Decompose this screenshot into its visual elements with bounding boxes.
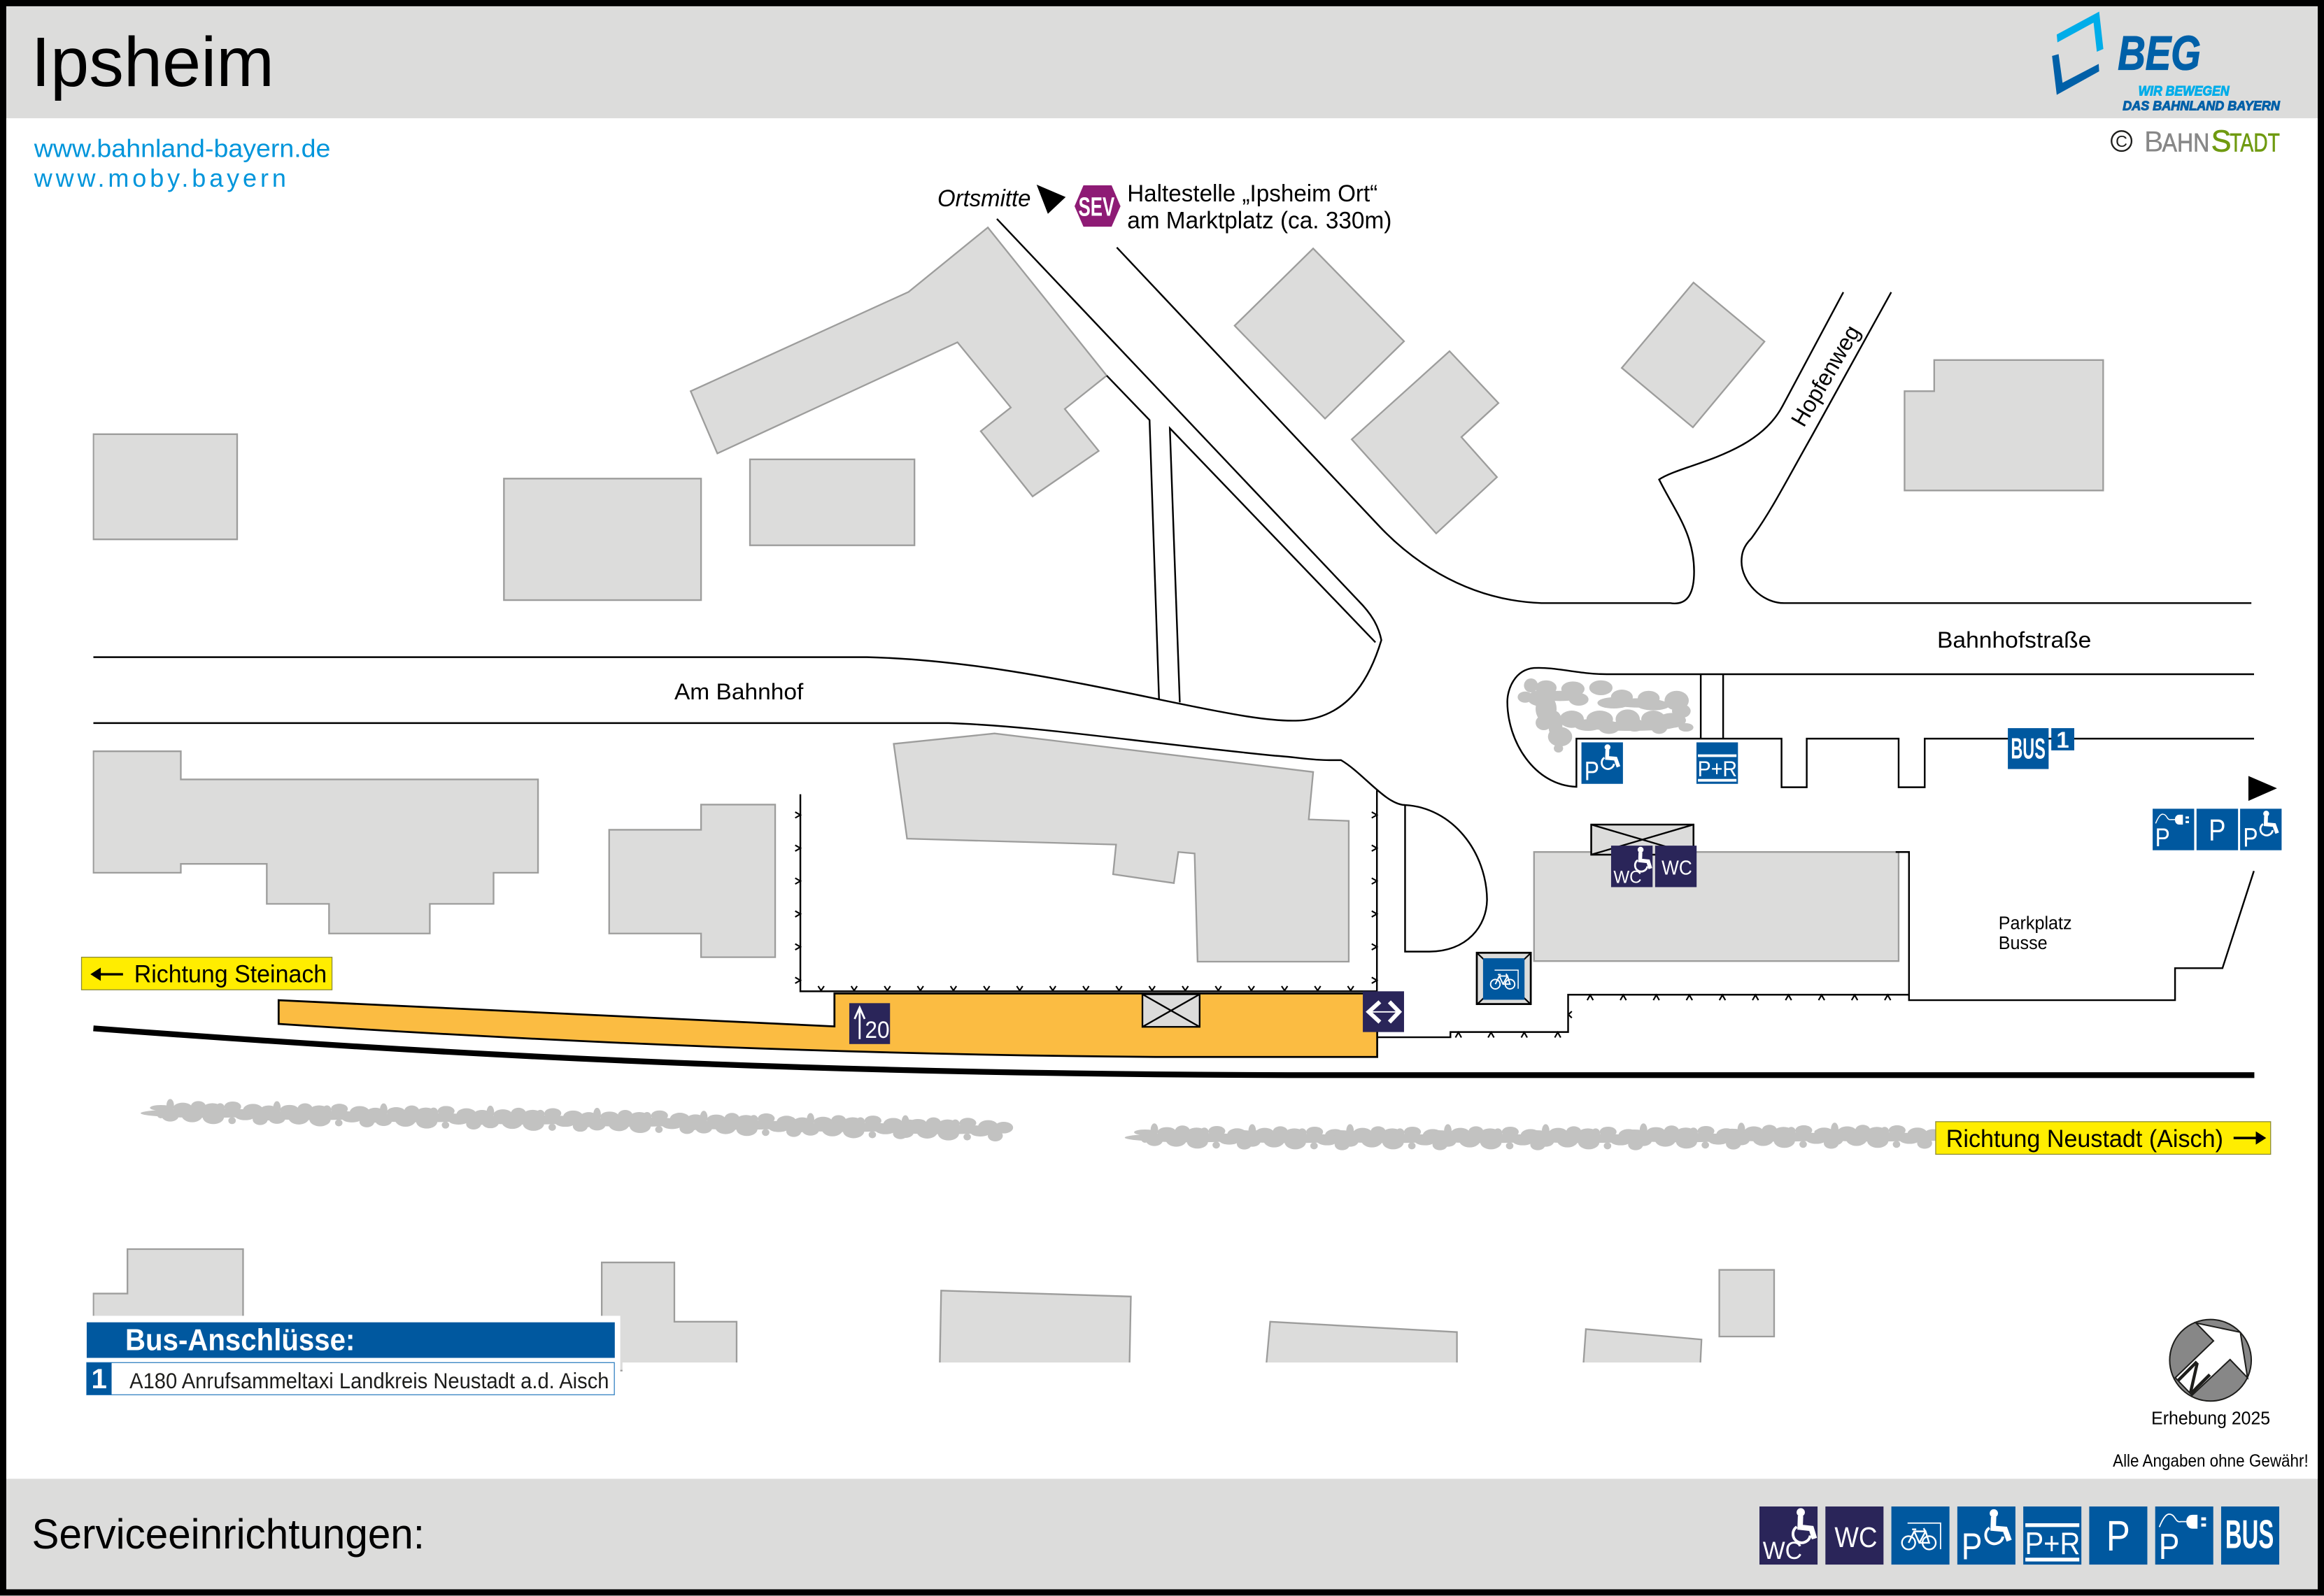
station shelter [1592,825,1694,855]
Ortsmitte label: Ortsmitte [937,185,1031,212]
icon: level access arrows [1363,991,1404,1032]
icon: accessible parking: P [1585,756,1599,786]
icon: accessible parking: P [1962,1527,1982,1568]
hedge rows along tracks [141,1099,1943,1150]
icon: accessible parking right [2240,808,2281,853]
icon: bus: BUS [2225,1512,2274,1557]
BahnStadt copyright logo: C [2116,132,2127,150]
parking hedge [1517,678,1694,753]
icon: SEV hexagon: SEV [1079,192,1115,222]
icon: e-charging parking: P [2155,823,2170,852]
icon: accessible WC: WC [1613,868,1642,888]
icon: parking [2089,1506,2147,1565]
fences [795,790,2254,1037]
bus line row [87,1362,614,1395]
BahnStadt copyright logo: B [2144,126,2163,158]
BahnStadt copyright logo: TADT [2230,129,2280,157]
icon: park and ride [2023,1506,2081,1565]
roads [93,219,2254,952]
icon: bus [2221,1506,2279,1565]
icon: accessible parking [1582,742,1623,786]
street labels [674,320,2091,704]
icon: accessible parking right: P [2243,822,2258,853]
icon: e-charging parking: P [2159,1526,2179,1567]
icon: direction arrow right [2248,776,2277,801]
icon: WC [1655,846,1696,887]
direction label Neustadt: Richtung Neustadt (Aisch) [1946,1125,2223,1153]
direction label Steinach [82,957,332,990]
BEG logo: DAS BAHNLAND BAYERN [2123,99,2281,113]
icon: north compass [2169,1320,2251,1403]
BEG logo: WIR BEWEGEN [2139,85,2230,99]
stop name: Haltestelle „Ipsheim Ort“ [1127,180,1377,207]
platform shelter [1142,995,1200,1027]
bus line row: 1 [92,1363,107,1395]
BEG logo: BEG [2118,27,2201,80]
footer service icons [1759,1506,2279,1568]
header band [6,6,2318,118]
street labels: Hopfenweg [1785,320,1865,431]
icon: parking: P [2106,1512,2130,1560]
icon: SEV hexagon [1075,185,1121,227]
heading: Bus-Anschlüsse: [125,1324,355,1358]
icon: park and ride: P+R [1698,756,1737,781]
stop location: am Marktplatz (ca. 330m) [1127,208,1391,234]
bus parking label [1999,912,2072,953]
icon: bike shelter [1477,953,1531,1004]
icon: park and ride: P+R [2025,1527,2080,1561]
footer heading: Serviceeinrichtungen: [32,1510,425,1558]
icon: bus stop number: 1 [2056,727,2069,753]
BahnStadt copyright logo [2111,125,2280,159]
icon: WC: WC [1661,857,1692,879]
icon: parking [2197,808,2238,850]
BEG logo [2052,12,2281,113]
web links: www.moby.bayern [34,164,286,192]
buildings [93,227,2103,1371]
direction label Steinach: Richtung Steinach [134,961,327,988]
icon: bus stop: BUS [2011,732,2046,764]
icon: accessible WC [1611,846,1652,888]
web links [34,134,330,192]
bus parking label: Busse [1999,932,2048,953]
icon: accessible WC [1759,1506,1818,1565]
platform [278,994,1377,1057]
icon: WC [1825,1506,1883,1565]
map edge mask [86,415,1778,1378]
bus parking label: Parkplatz [1999,912,2072,933]
icon: bus stop [2008,728,2048,769]
icon: bus stop number [2051,727,2074,753]
BahnStadt copyright logo: AHN [2162,129,2209,157]
icon: platform length 20 [849,1003,890,1044]
icon: park and ride [1696,742,1738,784]
title: Ipsheim [31,23,274,101]
icon: accessible WC: WC [1763,1537,1802,1565]
street labels: Bahnhofstraße [1937,627,2091,653]
icon: e-charging parking [2153,808,2194,852]
railway track [93,1028,2254,1075]
panel: bus connections [78,1316,621,1402]
icon: parking: P [2209,813,2226,847]
icon: bike shelter [1892,1506,1950,1565]
survey year: Erhebung 2025 [2151,1408,2270,1429]
icon: accessible parking [1957,1506,2015,1568]
icon: platform length 20: 20 [865,1017,890,1043]
icon: north compass: N [2169,1353,2219,1403]
icon: e-charging parking [2155,1506,2213,1567]
BahnStadt copyright logo: S [2211,125,2231,159]
heading [87,1323,615,1358]
SEV note [937,180,1391,234]
web links: www.bahnland-bayern.de [34,134,330,163]
footer band [6,1479,2318,1589]
disclaimer: Alle Angaben ohne Gewähr! [2113,1452,2309,1471]
icon: arrow to town centre [1037,185,1065,214]
bus line row: A180 Anrufsammeltaxi Landkreis Neustadt a.d. Aisch [129,1369,609,1393]
icon: WC: WC [1834,1521,1877,1553]
street labels: Am Bahnhof [674,678,804,704]
